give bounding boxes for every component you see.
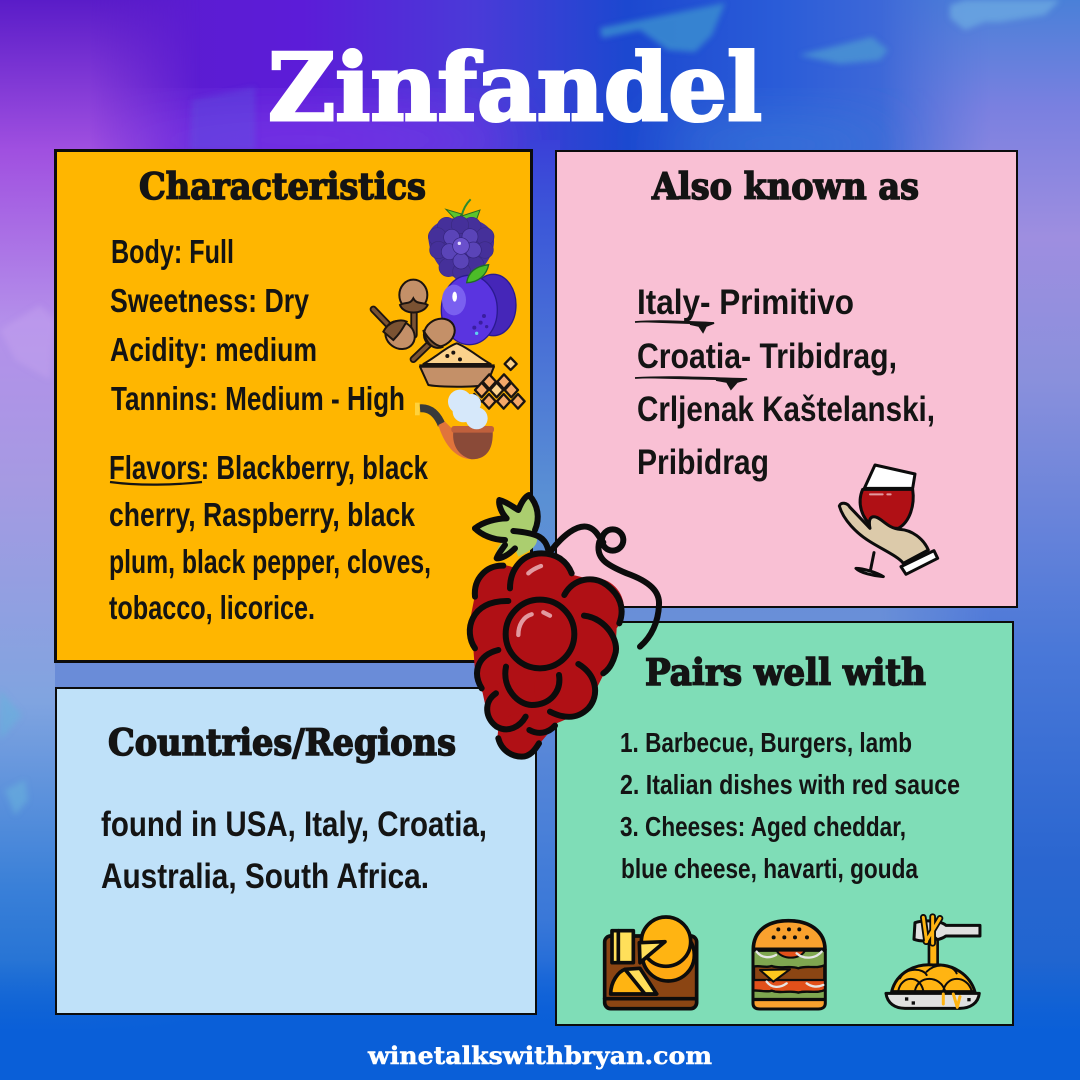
text block: food pairings: blue cheese, havarti, gouda <box>621 853 918 884</box>
panel: pairs well with <box>556 622 1013 1025</box>
text block: wine attributes: Acidity: medium <box>110 331 317 368</box>
icon: hand holding wine glass <box>839 465 938 577</box>
text block: synonyms: Croatia- Tribidrag, <box>637 337 897 376</box>
heading: also known as: Also known as <box>651 166 919 208</box>
outlines and stems <box>470 495 659 757</box>
text block: food pairings: 3. Cheeses: Aged cheddar, <box>620 811 906 842</box>
text block: synonyms: Pribidrag <box>637 443 769 482</box>
text block: wine attributes: Sweetness: Dry <box>110 282 310 319</box>
icon: plum <box>441 265 516 345</box>
title: Zinfandel <box>268 33 762 142</box>
heading: countries and regions: Countries/Regions <box>108 722 456 764</box>
panel: countries and regions <box>56 688 536 1014</box>
icon: burger <box>753 921 825 1009</box>
text block: flavors: cherry, Raspberry, black <box>109 496 416 533</box>
text block: regions list: found in USA, Italy, Croatia, <box>101 805 487 844</box>
heading: characteristics: Characteristics <box>139 166 426 208</box>
panel: also known as <box>556 151 1017 607</box>
text block: food pairings: 1. Barbecue, Burgers, lamb <box>620 727 912 758</box>
text block: synonyms: Italy- Primitivo <box>637 283 854 322</box>
text block: flavors: Flavors: Blackberry, black <box>109 449 428 486</box>
text block: wine attributes: Body: Full <box>111 233 234 270</box>
icon: cheese board <box>605 917 697 1009</box>
text block: synonyms: Crljenak Kaštelanski, <box>637 390 935 429</box>
text block: flavors: plum, black pepper, cloves, <box>109 543 431 580</box>
grape highlights <box>518 566 550 635</box>
icon: red grape cluster <box>468 495 659 757</box>
text block: regions list <box>101 805 487 896</box>
icon: food set <box>605 917 980 1009</box>
icon: tobacco pipe <box>417 390 494 459</box>
icon: cloves <box>373 280 460 359</box>
icon: blackberry <box>428 199 494 281</box>
icon: spaghetti on fork <box>886 917 980 1008</box>
text block: food pairings <box>620 727 960 884</box>
text block: wine attributes: Tannins: Medium - High <box>111 380 405 417</box>
icon: flavor ingredients <box>373 199 525 459</box>
grape leaf <box>473 495 538 558</box>
heading: pairs well with: Pairs well with <box>645 652 926 694</box>
icon: licorice pieces <box>468 358 525 409</box>
text block: flavors <box>109 449 431 626</box>
text block: synonyms <box>635 283 935 482</box>
panel: characteristics <box>56 150 532 662</box>
footer: website: winetalkswithbryan.com <box>367 1041 712 1070</box>
text block: flavors: tobacco, licorice. <box>109 589 315 626</box>
icon: bowl of spice <box>419 343 495 387</box>
text block: wine attributes <box>110 233 405 417</box>
text block: food pairings: 2. Italian dishes with red sauce <box>620 769 960 800</box>
grape bunch fill <box>468 553 624 757</box>
text block: regions list: Australia, South Africa. <box>101 857 429 896</box>
